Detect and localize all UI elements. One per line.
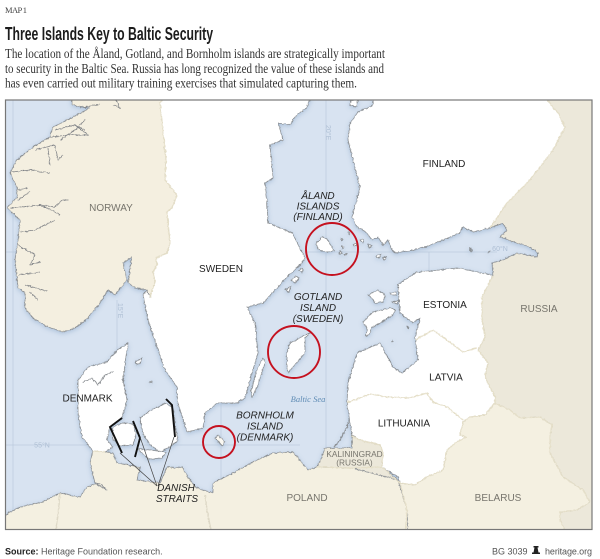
website: heritage.org [545,546,592,556]
country labels: LATVIA [429,372,463,384]
island labels: (DENMARK) [237,432,293,444]
island labels [156,189,343,505]
graticule labels: 20°E [324,125,332,141]
country labels: RUSSIA [520,304,558,315]
graticule labels [34,125,508,450]
graticule labels: 55°N [34,442,50,450]
source note: Source: Heritage Foundation research. [5,546,163,556]
map frame [6,100,592,530]
intro text: to security in the Baltic Sea. Russia has long recognized the value of these islands and [5,61,384,76]
red circle: Gotland [268,326,320,378]
Limfjord [83,372,113,385]
Kaliningrad [317,435,398,480]
Gulf of Riga islet [392,326,409,342]
Norway fjords [10,100,120,300]
island labels: GOTLAND [294,292,342,303]
Sweden [143,95,312,432]
island labels: (FINLAND) [293,212,343,223]
Denmark: Jutland [78,343,128,452]
Denmark: Kattegat islands [135,358,152,383]
graticule labels: 15°E [116,303,124,319]
island labels: (SWEDEN) [293,314,343,325]
Denmark: Funen [112,423,136,446]
land borders [55,95,590,535]
title: Three Islands Key to Baltic Security [5,24,213,44]
island labels: STRAITS [156,494,198,505]
Estonian small islands [390,292,399,304]
country labels: NORWAY [89,203,133,214]
Norway [7,95,177,332]
Denmark: Zealand [140,403,178,452]
country labels: SWEDEN [199,264,243,275]
Finnish archipelago [350,100,387,260]
Oland [251,358,265,398]
icon: liberty bell [532,546,540,554]
intro text [5,46,385,90]
graticule labels: 60°N [492,245,508,253]
country labels: BELARUS [475,493,522,504]
red circle: Bornholm [203,426,235,458]
island labels: DANISH [157,483,196,494]
Bornholm [215,435,225,446]
country labels: DENMARK [62,394,113,404]
Danish straits lines [110,399,175,486]
Baltic Sea label: Baltic Sea [291,394,325,404]
Estonia, Latvia and Lithuania [347,268,495,485]
country labels: (RUSSIA) [336,458,373,468]
Poland and Germany [0,450,408,535]
island labels: ISLAND [247,422,283,432]
Hiiumaa [368,290,385,303]
map [0,95,600,535]
land masses [0,95,600,535]
report number: BG 3039 [492,546,528,556]
country labels: POLAND [286,493,328,504]
Denmark: Lolland and Falster [138,449,166,459]
Gotland [287,333,310,373]
country labels: ESTONIA [423,300,467,311]
island labels: BORNHOLM [236,410,295,422]
island labels: ISLANDS [297,202,340,212]
Stockholm archipelago [285,268,303,292]
Saaremaa [363,308,395,336]
Curonian spit [334,418,349,447]
sea [6,100,538,514]
intro text: has even carried out military training exercises that simulated capturing them. [5,76,357,90]
red circle: Aland [306,223,358,275]
country labels [62,159,558,504]
Finland [348,95,565,253]
Finnish gulf islets [470,248,490,253]
country labels: LITHUANIA [378,418,430,430]
Russia [479,100,592,529]
map number label: MAP 1 [5,5,27,15]
country labels: FINLAND [423,159,465,170]
island labels: ÅLAND [300,189,335,202]
Aland islands [316,232,357,256]
country labels: KALININGRAD [326,449,383,459]
graticule [5,100,497,530]
island labels: ISLAND [300,303,336,314]
Belarus [398,403,590,535]
intro text: The location of the Åland, Gotland, and Bornholm islands are strategically important [5,46,385,61]
